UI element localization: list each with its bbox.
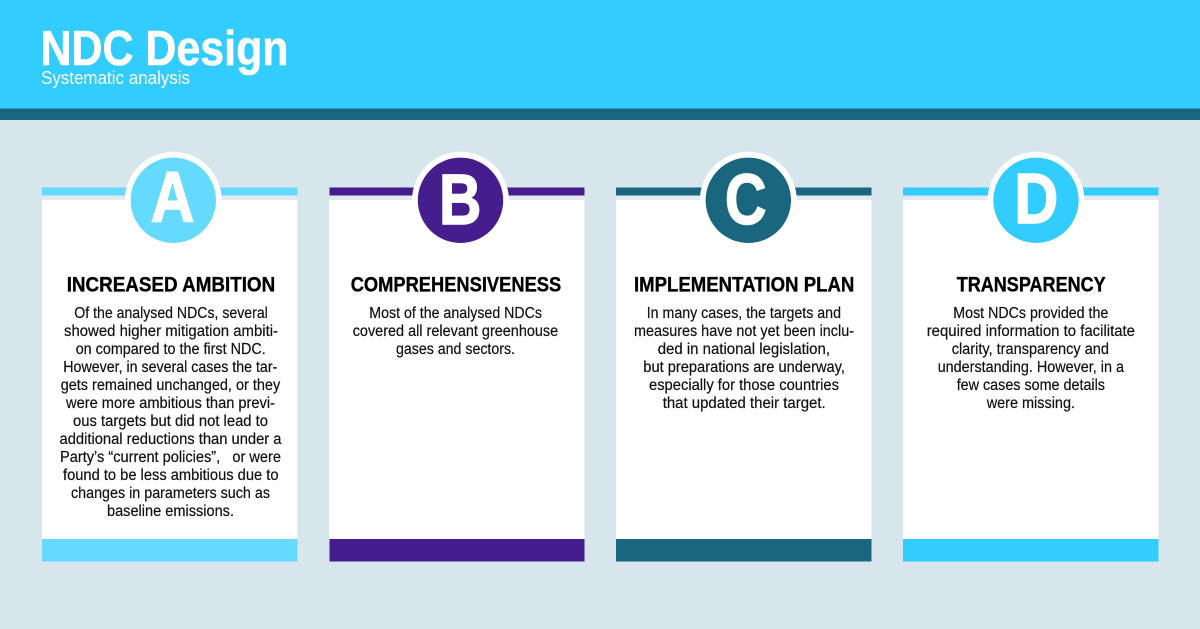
badge A (125, 152, 222, 249)
body text C: that updated their target. (663, 395, 826, 412)
body text A: changes in parameters such as (71, 485, 270, 502)
body text C: ded in national legislation, (658, 341, 830, 358)
body text A: additional reductions than under a (60, 431, 282, 448)
heading C: IMPLEMENTATION PLAN (634, 273, 854, 297)
body text C: measures have not yet been inclu- (634, 323, 854, 340)
body text D: required information to facilitate (927, 323, 1135, 340)
body text B (353, 305, 558, 358)
body text A: baseline emissions. (107, 503, 234, 520)
subtitle: Systematic analysis (41, 68, 190, 88)
body text A: Of the analysed NDCs, several (74, 305, 268, 322)
body text C (634, 305, 854, 412)
badge D: D (1014, 160, 1058, 239)
badge B (412, 152, 509, 249)
heading A: INCREASED AMBITION (67, 273, 275, 297)
badge A: A (151, 158, 194, 238)
header banner (0, 0, 1200, 120)
heading B: COMPREHENSIVENESS (351, 273, 561, 297)
body text A: gets remained unchanged, or they (61, 377, 280, 394)
body text D: clarity, transparency and (952, 341, 1109, 358)
body text A (60, 305, 282, 520)
body text A: showed higher mitigation ambiti- (64, 323, 278, 340)
body text D (927, 305, 1135, 412)
body text D: few cases some details (957, 377, 1105, 394)
badge B: B (439, 161, 481, 240)
badge C (700, 152, 797, 249)
panel B: comprehensiveness (329, 152, 584, 562)
badge C: C (725, 161, 766, 240)
body text B: covered all relevant greenhouse (353, 323, 558, 340)
body text D: Most NDCs provided the (953, 305, 1108, 322)
panel A: increased ambition (42, 152, 298, 562)
body text A: ous targets but did not lead to (73, 413, 268, 430)
badge D (988, 152, 1084, 249)
body text C: especially for those countries (649, 377, 839, 394)
body text B: gases and sectors. (396, 341, 515, 358)
heading D: TRANSPARENCY (957, 273, 1106, 297)
body text D: understanding. However, in a (938, 359, 1124, 376)
body text D: were missing. (986, 395, 1075, 412)
body text A: found to be less ambitious due to (63, 467, 278, 484)
body text C: In many cases, the targets and (647, 305, 841, 322)
body text A: However, in several cases the tar- (63, 359, 277, 376)
body text A: were more ambitious than previ- (65, 395, 275, 412)
body text A: on compared to the first NDC. (76, 341, 266, 358)
title: NDC Design (40, 22, 288, 76)
panel C: implementation plan (616, 152, 872, 562)
panel D: transparency (903, 152, 1158, 562)
body text B: Most of the analysed NDCs (369, 305, 542, 322)
body text C: but preparations are underway, (643, 359, 845, 376)
body text A: Party’s “current policies”, or were (60, 449, 281, 466)
